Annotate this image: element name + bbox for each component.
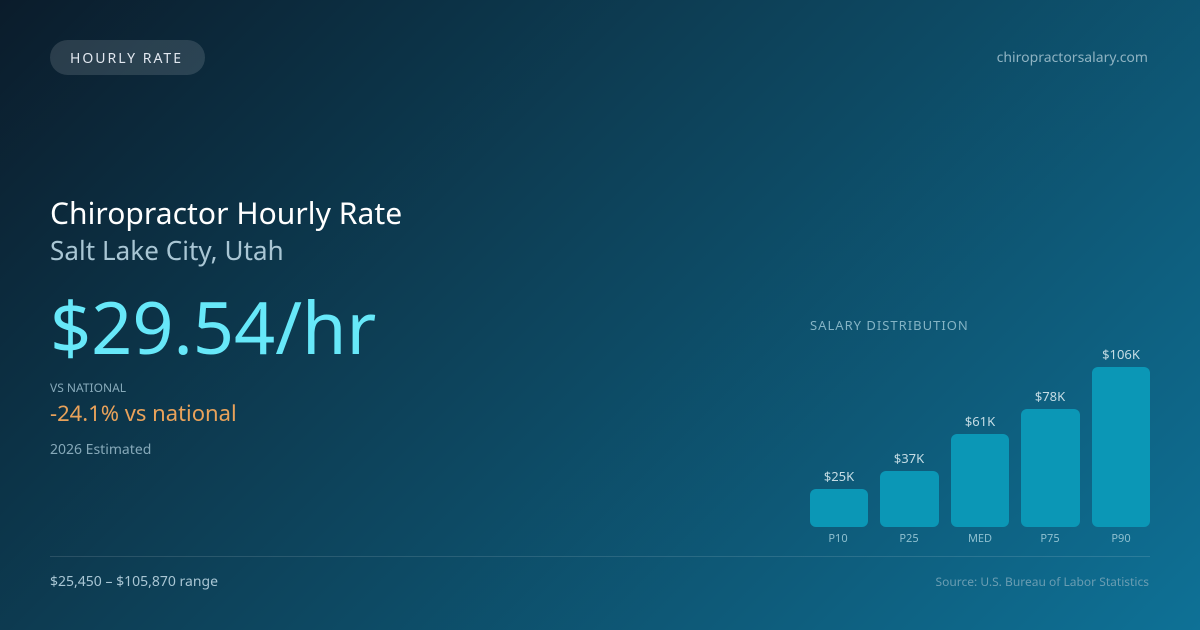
chart heading: SALARY DISTRIBUTION xyxy=(810,316,969,334)
comparison label: VS NATIONAL xyxy=(50,379,126,396)
bar: P25 xyxy=(880,449,939,546)
bar: MED: $61K xyxy=(965,412,995,430)
badge: hourly rate xyxy=(50,40,205,75)
bar: P10: $25K xyxy=(824,467,854,485)
title: Chiropractor Hourly Rate xyxy=(50,192,402,233)
estimate note: 2026 Estimated xyxy=(50,440,151,459)
comparison value: -24.1% vs national xyxy=(50,398,237,428)
bar: P75 xyxy=(1021,387,1080,546)
bar: P90: $106K xyxy=(1102,345,1140,363)
bar: P25: $37K xyxy=(894,449,924,467)
bar: P90: P90 xyxy=(1111,531,1131,546)
bar: P10: P10 xyxy=(828,531,848,546)
salary range: $25,450 – $105,870 range xyxy=(50,572,218,591)
badge: hourly rate: HOURLY RATE xyxy=(70,49,183,68)
bar: MED: MED xyxy=(968,531,992,546)
bar: P75: $78K xyxy=(1035,387,1065,405)
bar: P10 xyxy=(810,467,868,546)
source: Source: U.S. Bureau of Labor Statistics xyxy=(936,573,1149,590)
bar: P90 xyxy=(1092,345,1150,546)
subtitle: location: Salt Lake City, Utah xyxy=(50,232,284,268)
bar: P25: P25 xyxy=(899,531,919,546)
chart: salary distribution xyxy=(810,316,1150,546)
bar: MED xyxy=(951,412,1009,546)
bar: P75: P75 xyxy=(1040,531,1060,546)
site name: chiropractorsalary.com xyxy=(997,48,1148,67)
main hourly rate value: $29.54/hr xyxy=(50,278,376,376)
